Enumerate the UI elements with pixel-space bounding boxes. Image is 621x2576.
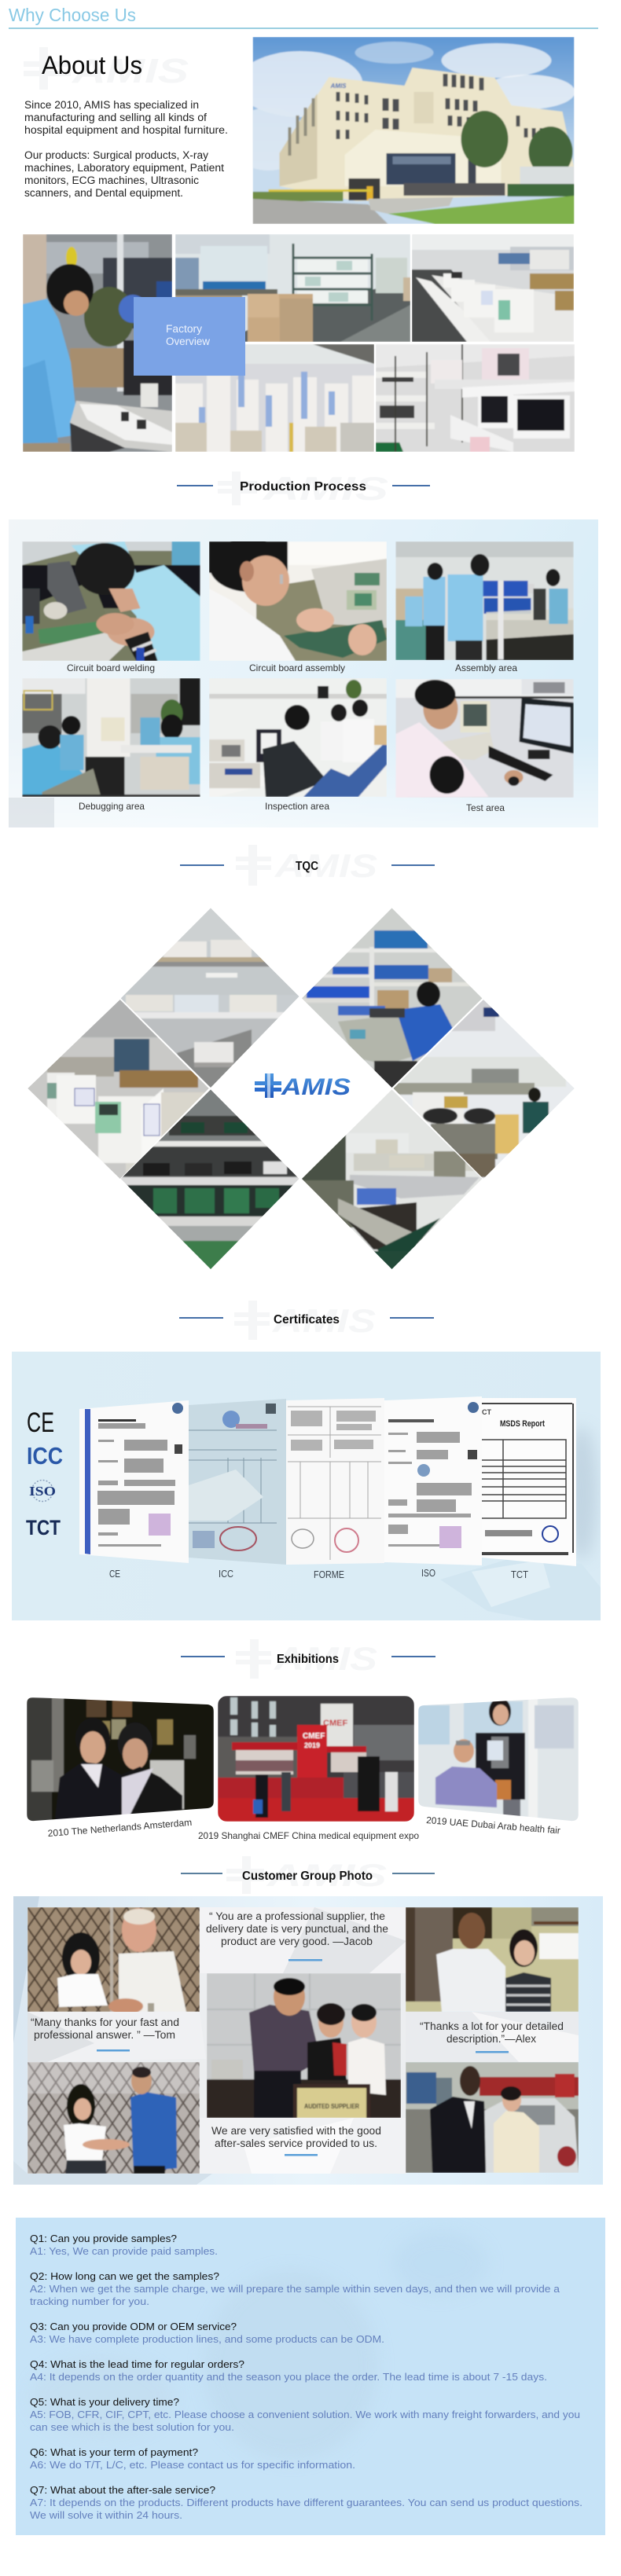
text: Q1 and A1: Q1: Can you provide samples?	[30, 2233, 177, 2244]
photo: debugging area	[22, 678, 200, 797]
photo: assembly worker	[23, 234, 172, 452]
text block: company introduction: scanners, and Dental equipment.	[24, 187, 183, 199]
callout: Factory Overview: Overview	[166, 336, 210, 347]
decorative ghost image in FAQ background	[31, 2232, 487, 2460]
text: Q4 and A4: Q4: What is the lead time for regular orders?	[30, 2358, 244, 2370]
text: Q7 and A7: Q7: What about the after-sale service?	[30, 2484, 215, 2496]
document: CE certificate	[79, 1400, 189, 1563]
caption: Dubai: 2019 UAE Dubai Arab health fair	[426, 1815, 560, 1836]
text: Q2 and A2: Q2: How long can we get the samples?	[30, 2270, 219, 2282]
text: testimonial Alex: “Thanks a lot for your detailed	[420, 2020, 564, 2032]
heading: TQC: TQC	[296, 860, 318, 873]
text: Q6 and A6	[30, 2446, 355, 2471]
photo: test bench	[299, 1084, 487, 1275]
text: Q7 and A7: We will solve it within 24 hours.	[30, 2509, 182, 2521]
text: Q1 and A1	[30, 2233, 218, 2257]
heading: Production Process: AMIS	[262, 470, 388, 507]
photo: audited supplier group: AUDITED SUPPLIER	[304, 2103, 359, 2110]
heading: Exhibitions: Exhibitions	[277, 1653, 339, 1666]
photo: analyzer production line	[412, 234, 574, 342]
text: testimonial Alex: description.”—Alex	[446, 2033, 536, 2045]
heading: Exhibitions	[181, 1639, 435, 1679]
heading: Exhibitions: AMIS	[274, 1640, 377, 1677]
text: after-sales testimonial	[211, 2125, 381, 2149]
text: Q7 and A7	[30, 2484, 582, 2521]
photo: worker at parts shelves	[299, 904, 487, 1092]
photo: ventilator rows	[175, 344, 374, 452]
text: after-sales testimonial: We are very satisfied with the good	[211, 2125, 381, 2137]
document: TCT MSDS report: CT	[482, 1408, 491, 1416]
heading: Certificates: AMIS	[272, 1302, 376, 1339]
heading: Certificates	[179, 1301, 434, 1340]
watermark: about: AMIS	[72, 52, 189, 90]
text: after-sales testimonial: after-sales service provided to us.	[215, 2137, 377, 2149]
text: Q5 and A5: A5: FOB, CFR, CIF, CPT, etc. Please choose a convenient solution. We work with many freight forwarders, and you	[30, 2409, 580, 2420]
text block: company introduction: machines, Laboratory equipment, Patient	[24, 162, 224, 174]
text: Q4 and A4: A4: It depends on the order quantity and the season you place the order. The lead time is about 7 -15 days.	[30, 2371, 547, 2383]
icon: TCT mark: TCT	[26, 1516, 61, 1539]
section title: Why Choose Us: Why Choose Us	[9, 5, 136, 25]
photo: circuit board welding	[22, 541, 200, 661]
photo: company building	[253, 37, 574, 224]
photo: inspection area	[209, 678, 387, 797]
photo: assembly area	[395, 541, 574, 660]
caption: Assembly area: Assembly area	[455, 662, 517, 673]
photo: warehouse shelves	[175, 234, 410, 342]
heading: Customer Group Photo: AMIS	[266, 1859, 387, 1893]
panel: about us	[23, 37, 575, 452]
text block: company introduction	[24, 99, 228, 199]
text: testimonial Jacob: product are very good. —Jacob	[221, 1936, 373, 1947]
text: testimonial Jacob: delivery date is very punctual, and the	[206, 1923, 388, 1935]
text: Q6 and A6: A6: We do T/T, L/C, etc. Please contact us for specific information.	[30, 2459, 355, 2471]
document: ISO certificate	[384, 1396, 482, 1565]
text block: company introduction: monitors, ECG machines, Ultrasonic	[24, 174, 199, 186]
captions: certificate names: ICC	[219, 1568, 233, 1580]
photo: company building: AMIS	[330, 83, 347, 90]
captions: certificate names	[109, 1567, 528, 1580]
captions: certificate names: CE	[109, 1568, 120, 1580]
watermark: about	[24, 47, 189, 90]
captions: certificate names: TCT	[511, 1569, 528, 1580]
caption: Circuit board assembly: Circuit board assembly	[249, 662, 345, 673]
photo: workshop interior	[389, 998, 578, 1183]
heading: Customer Group Photo	[181, 1856, 435, 1894]
heading: Certificates: Certificates	[274, 1313, 340, 1327]
document: TCT MSDS report: MSDS Report	[500, 1419, 545, 1429]
document: FORME certificate	[286, 1398, 384, 1565]
photo: Amsterdam exhibition	[27, 1697, 214, 1823]
photo: analyzers on production line	[24, 998, 212, 1183]
icon: CE mark: CE	[27, 1407, 54, 1438]
logo: AMIS: AMIS	[281, 1074, 351, 1100]
photo: test area	[395, 679, 574, 798]
text: Q2 and A2: A2: When we get the sample charge, we will prepare the sample within seven days, and then we will provide a	[30, 2283, 560, 2295]
panel: production process	[9, 519, 598, 827]
heading: Customer Group Photo: Customer Group Photo	[242, 1870, 373, 1883]
text: testimonial Tom: “Many thanks for your fast and	[31, 2016, 179, 2028]
panel: exhibitions	[27, 1696, 579, 1841]
text: Q7 and A7: A7: It depends on the products. Different products have different guarantees. You can send us product questions.	[30, 2497, 582, 2508]
caption: Test area: Test area	[466, 802, 505, 813]
text: Q6 and A6: Q6: What is your term of payment?	[30, 2446, 198, 2458]
photo: CMEF Shanghai exhibition: CMEF	[323, 1719, 347, 1728]
heading: TQC: AMIS	[274, 847, 377, 884]
photo: CMEF Shanghai exhibition: CMEF	[303, 1732, 325, 1741]
text: Q5 and A5	[30, 2396, 580, 2433]
callout: Factory Overview: Factory	[166, 323, 202, 335]
captions: certificate names: FORME	[314, 1569, 344, 1580]
photo: CMEF Shanghai exhibition: 2019	[304, 1741, 320, 1749]
callout: Factory Overview	[134, 297, 245, 376]
panel: FAQ	[16, 2218, 605, 2535]
photo: customer handshake	[28, 2062, 200, 2174]
photo: circuit boards on shelves	[118, 1084, 303, 1273]
photo: monitors on racks	[376, 344, 575, 452]
text: testimonial Tom: professional answer. ” —Tom	[34, 2029, 175, 2041]
text: testimonial Jacob	[206, 1910, 388, 1947]
text: Q3 and A3	[30, 2321, 384, 2345]
photo: CMEF Shanghai exhibition	[218, 1696, 414, 1822]
text: testimonial Jacob: “ You are a professional supplier, the	[209, 1910, 385, 1922]
diagram: TQC diamond photo mosaic	[24, 904, 578, 1275]
text: Q4 and A4	[30, 2358, 547, 2383]
icon: ISO mark: ISO	[29, 1484, 56, 1499]
panel: certificates	[12, 1352, 601, 1620]
icon: ICC mark: ICC	[27, 1442, 63, 1470]
text block: company introduction: Our products: Surgical products, X-ray	[24, 149, 208, 161]
heading: TQC	[180, 845, 435, 886]
logo: AMIS	[255, 1073, 351, 1100]
text: Q2 and A2	[30, 2270, 560, 2307]
background: faceted testimonial area	[28, 1907, 579, 2174]
captions: certificate names: ISO	[421, 1567, 435, 1579]
text: Q5 and A5: Q5: What is your delivery time?	[30, 2396, 179, 2408]
text: Q5 and A5: can see which is the best solution for you.	[30, 2421, 234, 2433]
photo: customer Alex	[406, 1907, 579, 2012]
caption: Debugging area: Debugging area	[79, 801, 145, 812]
text: testimonial Alex	[420, 2020, 564, 2045]
text block: company introduction: hospital equipment and hospital furniture.	[24, 124, 228, 136]
text block: company introduction: manufacturing and selling all kinds of	[24, 112, 207, 123]
photo: customer by car	[406, 2062, 579, 2173]
photo: Dubai Arab Health fair	[418, 1697, 579, 1822]
photo: audited supplier group	[207, 1973, 401, 2118]
photo: customer Tom	[28, 1907, 200, 2012]
icon: ISO mark	[29, 1481, 56, 1501]
text: Q3 and A3: Q3: Can you provide ODM or OEM service?	[30, 2321, 237, 2332]
caption: Shanghai CMEF: 2019 Shanghai CMEF China medical equipment expo	[198, 1830, 419, 1841]
heading: About Us: About Us	[42, 51, 142, 79]
photo: electrosurgical units on shelves	[118, 904, 303, 1092]
text: Q1 and A1: A1: Yes, We can provide paid samples.	[30, 2245, 218, 2257]
caption: Circuit board welding: Circuit board welding	[67, 662, 155, 673]
text block: company introduction: Since 2010, AMIS has specialized in	[24, 99, 199, 111]
caption: Amsterdam: 2010 The Netherlands Amsterdam	[47, 1817, 193, 1839]
caption: Inspection area: Inspection area	[265, 801, 329, 812]
heading: Production Process	[177, 470, 430, 507]
heading: Production Process: Production Process	[240, 480, 366, 494]
text: Q3 and A3: A3: We have complete production lines, and some products can be ODM.	[30, 2333, 384, 2345]
text: testimonial Tom	[31, 2016, 179, 2041]
photo: circuit board assembly	[209, 541, 387, 661]
panel: customer group photos	[13, 1896, 603, 2185]
document: TCT MSDS report	[482, 1398, 576, 1566]
document: ICC certificate	[189, 1399, 286, 1565]
text: Q2 and A2: tracking number for you.	[30, 2295, 149, 2307]
